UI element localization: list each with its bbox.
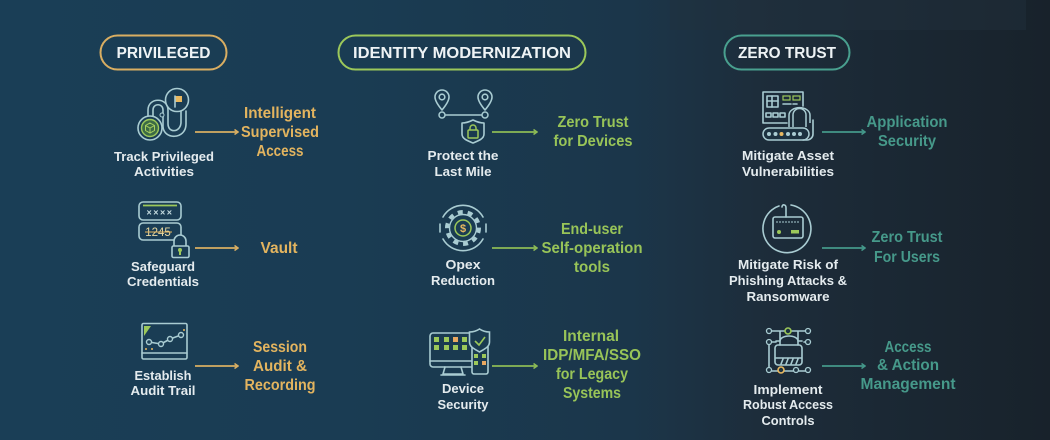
icon: track privileged activities bbox=[138, 88, 188, 140]
panel: zero trust bbox=[724, 36, 956, 428]
label: mitigate risk of phishing: Phishing Attacks & bbox=[729, 274, 847, 288]
label: device security: Device bbox=[442, 382, 484, 396]
heading: privileged bbox=[100, 36, 226, 70]
label: opex reduction: Opex bbox=[446, 258, 481, 272]
label: implement robust access controls: Robust Access bbox=[743, 398, 833, 412]
label: establish audit trail: Establish bbox=[134, 369, 192, 383]
result: end-user self-operation tools: End-user bbox=[561, 221, 623, 238]
result: zero trust for devices: Zero Trust bbox=[558, 114, 628, 131]
icon: safeguard credentials: 1245 bbox=[145, 227, 171, 239]
icon: safeguard credentials: ×××× bbox=[146, 208, 174, 218]
icon: opex reduction: $ bbox=[460, 223, 466, 235]
result: session audit and recording: Recording bbox=[244, 377, 316, 394]
label: track privileged activities: Activities bbox=[134, 165, 194, 179]
result: intelligent supervised access: Access bbox=[256, 143, 304, 160]
panel: identity modernization bbox=[338, 36, 642, 412]
label: device security: Security bbox=[438, 398, 489, 412]
label: track privileged activities: Track Privileged bbox=[114, 150, 214, 164]
label: safeguard credentials: Credentials bbox=[127, 275, 199, 289]
result: session audit and recording: Audit & bbox=[253, 358, 307, 375]
icon: opex reduction bbox=[440, 205, 486, 251]
label: mitigate asset vulnerabilities: Vulnerabilities bbox=[742, 165, 834, 179]
arrow bbox=[195, 247, 238, 249]
arrow bbox=[822, 247, 865, 249]
result: end-user self-operation tools: Self-operation bbox=[542, 240, 642, 257]
result: session audit and recording: Session bbox=[253, 339, 307, 356]
label: opex reduction: Reduction bbox=[431, 274, 495, 288]
result: application security: Security bbox=[878, 133, 936, 150]
label: mitigate risk of phishing: Mitigate Risk of bbox=[738, 258, 839, 272]
label: implement robust access controls: Implement bbox=[754, 383, 823, 397]
icon: mitigate risk of phishing bbox=[763, 205, 811, 253]
panel: privileged bbox=[100, 36, 319, 398]
label: protect the last mile: Protect the bbox=[428, 149, 499, 163]
result: application security: Application bbox=[866, 114, 948, 131]
arrow bbox=[492, 247, 537, 249]
label: establish audit trail: Audit Trail bbox=[130, 384, 196, 398]
arrow bbox=[822, 131, 865, 133]
result: zero trust for users: Zero Trust bbox=[872, 229, 942, 246]
arrow bbox=[195, 365, 238, 367]
result: zero trust for devices: for Devices bbox=[554, 133, 632, 150]
heading: zero trust bbox=[724, 36, 850, 70]
result: vault: Vault bbox=[260, 240, 298, 257]
icon: implement robust access controls bbox=[766, 328, 810, 373]
result: zero trust for users: For Users bbox=[874, 249, 940, 266]
heading: identity modernization bbox=[338, 36, 586, 70]
result: internal idp mfa sso: for Legacy bbox=[556, 366, 628, 383]
result: internal idp mfa sso: Internal bbox=[563, 328, 619, 345]
arrow bbox=[492, 131, 537, 133]
arrow bbox=[822, 365, 865, 367]
label: mitigate asset vulnerabilities: Mitigate Asset bbox=[742, 149, 835, 163]
heading: identity modernization: IDENTITY MODERNIZATION bbox=[353, 45, 571, 62]
arrow bbox=[195, 131, 238, 133]
result: access and action management: Access bbox=[884, 339, 932, 356]
arrow bbox=[492, 365, 537, 367]
icon: establish audit trail bbox=[142, 324, 187, 359]
label: implement robust access controls: Controls bbox=[762, 414, 815, 428]
icon: mitigate asset vulnerabilities bbox=[763, 92, 813, 140]
result: intelligent supervised access: Supervised bbox=[241, 124, 319, 141]
result: internal idp mfa sso: IDP/MFA/SSO bbox=[543, 347, 641, 364]
icon: protect the last mile bbox=[435, 90, 492, 143]
result: access and action management: & Action bbox=[877, 357, 939, 374]
label: mitigate risk of phishing: Ransomware bbox=[746, 290, 830, 304]
heading: zero trust: ZERO TRUST bbox=[738, 45, 836, 62]
label: protect the last mile: Last Mile bbox=[434, 165, 492, 179]
result: internal idp mfa sso: Systems bbox=[563, 385, 621, 402]
result: end-user self-operation tools: tools bbox=[574, 259, 610, 276]
result: access and action management: Management bbox=[860, 376, 956, 393]
icon: safeguard credentials bbox=[139, 202, 189, 258]
icon: device security bbox=[430, 329, 490, 375]
result: intelligent supervised access: Intelligent bbox=[244, 105, 316, 122]
heading: privileged: PRIVILEGED bbox=[116, 45, 210, 62]
label: safeguard credentials: Safeguard bbox=[131, 260, 195, 274]
